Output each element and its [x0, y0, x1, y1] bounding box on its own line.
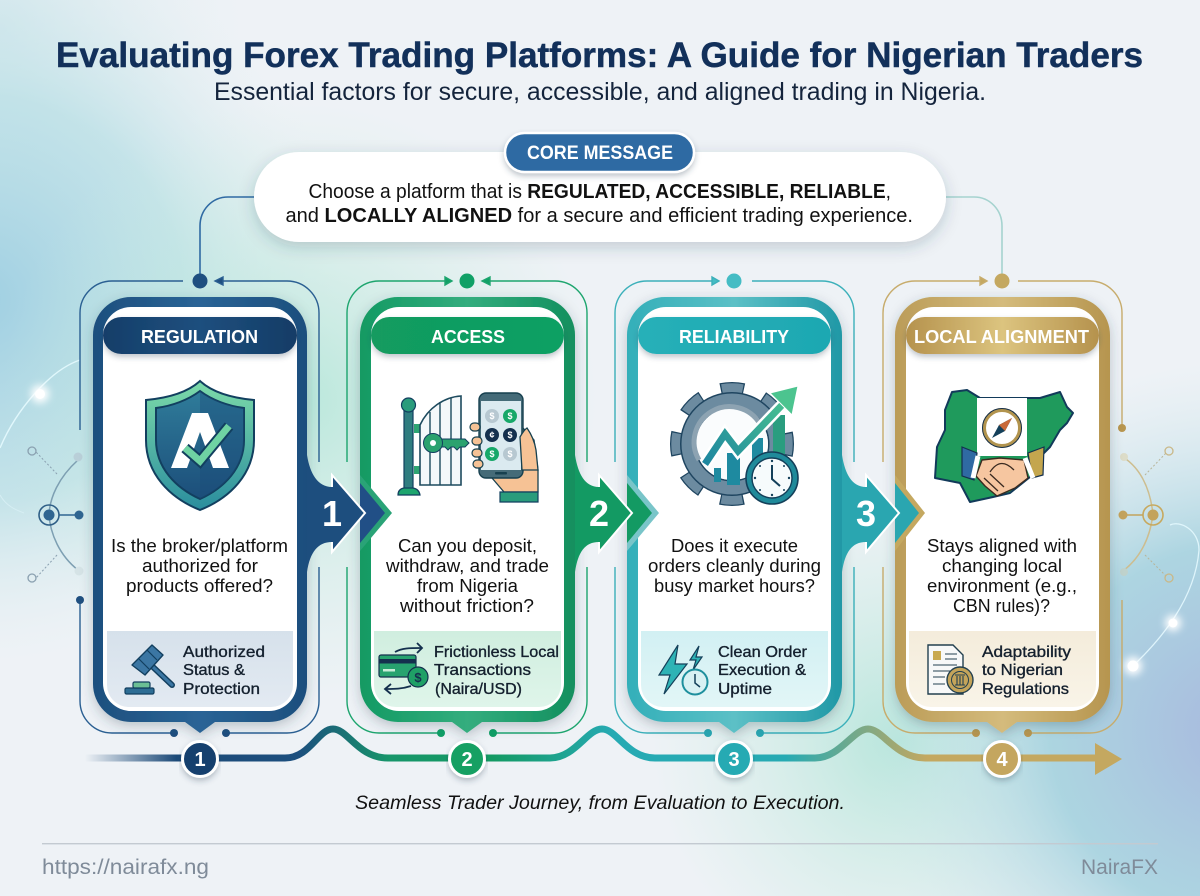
icon: gate, key and phone: [398, 393, 538, 502]
journey road line: [85, 729, 1097, 758]
arrow 2: [575, 455, 659, 572]
card: reliability: [627, 297, 842, 733]
panel text: Execution &: [718, 662, 806, 679]
header pill: [371, 317, 564, 354]
question text: Stays aligned with: [927, 536, 1077, 556]
icon: gate, key and phone: ¢: [489, 430, 495, 440]
panel text: Uptime: [718, 681, 772, 698]
panel text: [183, 644, 265, 698]
panel text: Frictionless Local: [434, 644, 559, 661]
panel text: Status &: [183, 662, 245, 679]
header pill: LOCAL ALIGNMENT: [914, 327, 1089, 347]
arrow 1: 1: [322, 493, 342, 534]
icon: card and transfer arrows: [379, 643, 428, 694]
arrow 3: 3: [856, 493, 876, 534]
icon: document and seal: [928, 645, 973, 694]
icon: shield with check: [146, 381, 254, 510]
step marker 2: [450, 742, 484, 776]
bottom panel: [374, 631, 561, 707]
icon: lightning and clock: [659, 645, 708, 694]
question text: [385, 536, 549, 616]
frame: local alignment: [883, 274, 1126, 737]
bottom panel: [909, 631, 1096, 707]
question text: orders cleanly during: [648, 556, 821, 576]
left side network decoration: [28, 447, 84, 582]
frame: reliability: [615, 274, 854, 737]
core message line 1: Choose a platform that is REGULATED, ACCESSIBLE, RELIABLE,: [308, 181, 891, 203]
core message badge: [505, 133, 694, 172]
panel text: Regulations: [982, 681, 1069, 698]
question text: environment (e.g.,: [927, 576, 1077, 596]
question text: Can you deposit,: [398, 536, 537, 556]
icon: gate, key and phone: $: [507, 449, 513, 459]
arrow 3: [842, 455, 925, 572]
bottom panel: [641, 631, 828, 707]
header pill: [906, 317, 1099, 354]
header pill: ACCESS: [431, 327, 505, 347]
question text: authorized for: [142, 556, 258, 576]
arrow 1: [307, 455, 392, 572]
step marker 3: 3: [728, 749, 740, 771]
step marker 2: 2: [461, 749, 473, 771]
panel text: Adaptability: [982, 644, 1071, 661]
core message line 2: and LOCALLY ALIGNED for a secure and efficient trading experience.: [286, 205, 913, 227]
connector: message to local alignment: [946, 197, 1002, 281]
panel text: (Naira/USD): [435, 681, 522, 698]
icon: gate, key and phone: $: [489, 449, 495, 459]
right light streak: [1124, 524, 1199, 675]
question text: without friction?: [399, 596, 534, 616]
question text: products offered?: [126, 576, 273, 596]
frame: access: [347, 274, 587, 737]
arrow 2: 2: [589, 493, 609, 534]
icon: Nigeria map and handshake: [935, 390, 1073, 502]
step marker 4: [984, 742, 1020, 776]
panel text: Authorized: [183, 644, 265, 661]
icon: gavel: [125, 645, 172, 694]
card: regulation: [93, 297, 307, 733]
question text: Does it execute: [671, 536, 798, 556]
question text: withdraw, and trade: [385, 556, 549, 576]
step marker 1: [182, 742, 218, 776]
core message badge: CORE MESSAGE: [527, 143, 673, 164]
icon: card and transfer arrows: $: [414, 670, 422, 685]
panel text: [718, 644, 808, 698]
header pill: RELIABILITY: [679, 327, 789, 347]
question text: [111, 536, 288, 596]
journey caption: Seamless Trader Journey, from Evaluation to Execution.: [355, 793, 845, 814]
footer url: https://nairafx.ng: [42, 855, 209, 879]
card: access: [360, 297, 575, 733]
bottom panel: [107, 631, 293, 707]
right side network decoration: [1118, 447, 1173, 582]
icon: gate, key and phone: $: [507, 430, 513, 440]
question text: busy market hours?: [654, 576, 815, 596]
header pill: REGULATION: [141, 327, 258, 347]
footer brand: NairaFX: [1081, 855, 1158, 879]
core message panel: [254, 133, 946, 242]
title: Evaluating Forex Trading Platforms: A Guide for Nigerian Traders: [56, 36, 1143, 75]
panel text: Transactions: [434, 662, 531, 679]
journey arrowhead: [1095, 743, 1122, 775]
left light streak: [0, 360, 80, 513]
connector: message to regulation: [200, 197, 254, 281]
question text: Is the broker/platform: [111, 536, 288, 556]
icon: gear, chart arrow and clock: [677, 386, 798, 504]
question text: [927, 536, 1077, 616]
panel text: Clean Order: [718, 644, 808, 661]
subtitle: Essential factors for secure, accessible, and aligned trading in Nigeria.: [214, 78, 986, 106]
header pill: [103, 317, 297, 354]
question text: from Nigeria: [417, 576, 519, 596]
panel text: [434, 644, 559, 698]
step marker 3: [716, 742, 752, 776]
step marker 1: 1: [194, 749, 206, 771]
question text: changing local: [942, 556, 1062, 576]
header pill: [638, 317, 831, 354]
panel text: [982, 644, 1071, 698]
icon: gate, key and phone: $: [489, 411, 495, 421]
step marker 4: 4: [996, 749, 1008, 771]
card: local alignment: [895, 297, 1110, 733]
frame: regulation: [76, 274, 319, 737]
question text: CBN rules)?: [953, 596, 1050, 616]
icon: gate, key and phone: $: [507, 411, 513, 421]
question text: [648, 536, 821, 596]
panel text: Protection: [183, 681, 260, 698]
panel text: to Nigerian: [982, 662, 1063, 679]
